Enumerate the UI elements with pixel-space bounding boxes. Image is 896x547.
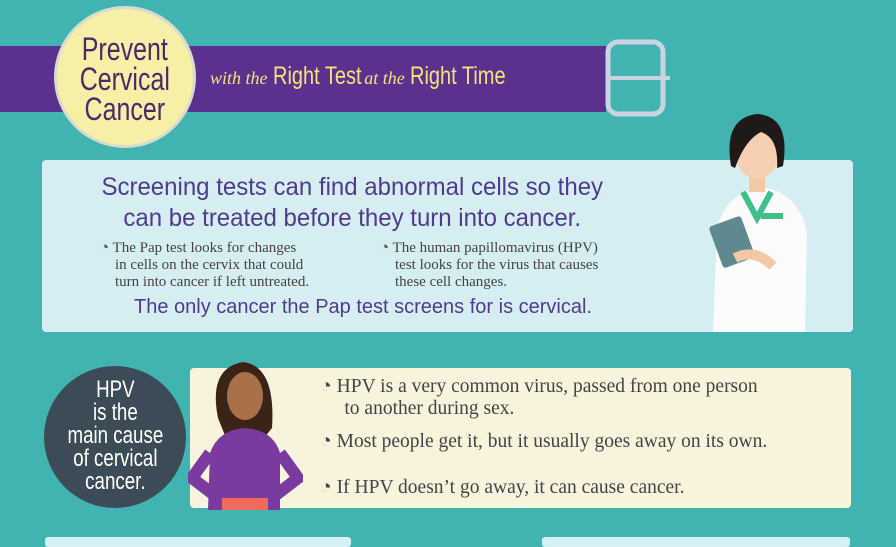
heading xyxy=(101,173,603,232)
HPV circle: of cervical xyxy=(73,445,157,472)
header band xyxy=(0,46,606,112)
fact list: ◔ HPV is a very common virus, passed from one person xyxy=(320,376,758,397)
fact list xyxy=(320,376,767,498)
subtitle: Right Time xyxy=(410,62,505,90)
panel: screening tests xyxy=(42,160,853,332)
fact list: ◔ If HPV doesn’t go away, it can cause cancer. xyxy=(320,477,684,498)
text block: HPV test: ◔ The human papillomavirus (HPV) xyxy=(380,240,598,256)
text block: pap test xyxy=(100,240,309,290)
title circle xyxy=(54,6,196,148)
fact list: ◔ Most people get it, but it usually goes away on its own. xyxy=(320,431,767,452)
icon: calendar/clock frame xyxy=(606,40,670,116)
icon: woman xyxy=(188,362,303,510)
title circle: Cancer xyxy=(85,91,165,127)
icon: nurse xyxy=(709,114,807,332)
subtitle: with the at the xyxy=(210,68,405,88)
heading: Screening tests can find abnormal cells so they xyxy=(101,173,603,201)
text block: HPV test: test looks for the virus that causes xyxy=(395,257,598,273)
HPV circle: main cause xyxy=(67,422,163,449)
title circle: Prevent xyxy=(82,31,168,67)
text block: HPV test xyxy=(380,240,598,290)
HPV circle xyxy=(44,366,186,508)
subtitle: Right Test xyxy=(272,62,361,90)
callout: The only cancer the Pap test screens for is cervical. xyxy=(134,296,592,318)
text block: pap test: ◔ The Pap test looks for changes xyxy=(100,240,296,256)
heading: can be treated before they turn into cancer. xyxy=(123,204,581,232)
text block: HPV test: these cell changes. xyxy=(395,274,507,290)
fact list: to another during sex. xyxy=(344,398,514,419)
bottom panels xyxy=(45,537,351,547)
title circle: Cervical xyxy=(80,61,170,97)
panel: HPV facts xyxy=(190,368,851,508)
subtitle xyxy=(210,62,505,90)
HPV circle: cancer. xyxy=(85,468,145,495)
HPV circle: HPV xyxy=(96,376,134,403)
HPV circle: is the xyxy=(93,399,137,426)
text block: pap test: in cells on the cervix that could xyxy=(115,257,303,273)
text block: pap test: turn into cancer if left untreated. xyxy=(115,274,309,290)
